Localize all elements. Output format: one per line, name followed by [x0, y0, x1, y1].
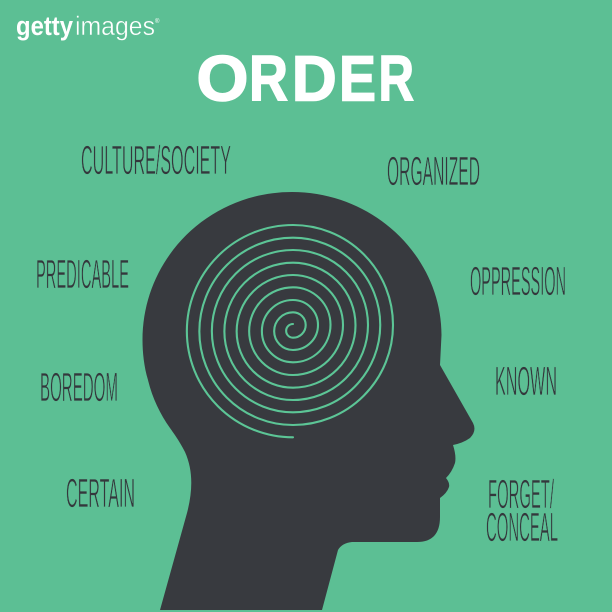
infographic canvas: PREDICABLE: [36, 251, 129, 297]
title: D: [292, 42, 337, 114]
infographic canvas: CERTAIN: [66, 470, 135, 516]
watermark: gettyimages logo: getty: [16, 11, 73, 41]
title: E: [339, 42, 376, 114]
watermark: gettyimages logo: [16, 11, 160, 41]
title: R: [249, 42, 288, 114]
head silhouette: [142, 192, 474, 610]
watermark: gettyimages logo: ®: [155, 18, 160, 25]
infographic canvas: BOREDOM: [40, 364, 118, 410]
label: forget/conceal: [486, 471, 558, 550]
watermark: gettyimages logo: images: [75, 11, 155, 41]
spiral inside head: [187, 225, 393, 437]
infographic canvas: CULTURE/SOCIETY: [81, 137, 231, 183]
title: O: [196, 42, 248, 114]
title: R: [378, 42, 414, 114]
